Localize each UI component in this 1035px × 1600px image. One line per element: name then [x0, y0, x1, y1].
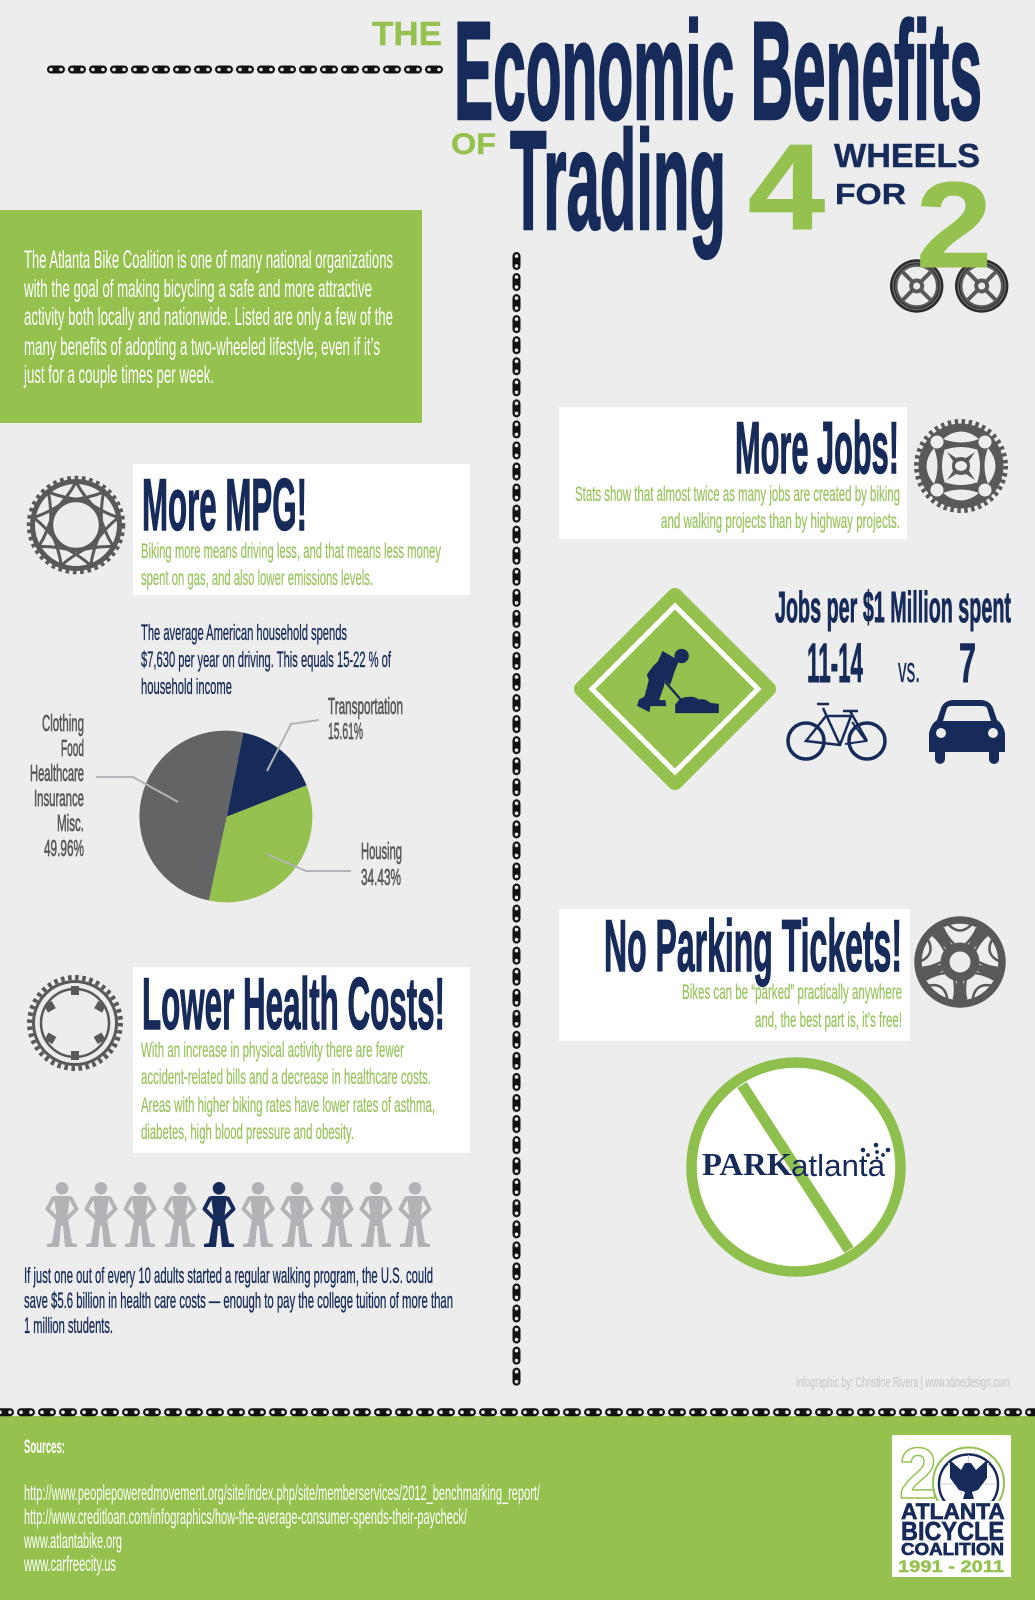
panel: introduction: with the goal of making bicycling a safe and more attractive	[23, 275, 372, 303]
logo years: 1991 - 2011	[898, 1557, 1004, 1576]
logo text: BICYCLE	[901, 1516, 1004, 1546]
source links: http://www.creditloan.com/infographics/how-the-average-consumer-spends-their-paycheck/	[24, 1506, 467, 1529]
text: walking program: 1 million students.	[24, 1313, 113, 1338]
icon: road work sign	[582, 596, 768, 782]
body text: more mpg: Biking more means driving less, and that means less money	[141, 539, 441, 563]
panel: lower health costs	[133, 964, 470, 1153]
title	[372, 0, 1008, 313]
body text: lower health costs: accident-related bills and a decrease in healthcare costs.	[141, 1065, 431, 1089]
chart: jobs per million	[775, 583, 1011, 764]
chain: top horizontal	[47, 65, 444, 74]
chart: jobs per million: vs.	[898, 649, 920, 690]
pie labels	[30, 693, 403, 890]
pie chart	[96, 720, 351, 902]
source links: www.atlantabike.org	[23, 1530, 122, 1553]
chain: centre vertical	[512, 252, 521, 1387]
panel: introduction: The Atlanta Bike Coalition is one of many national organizations	[24, 246, 393, 274]
text: walking program: If just one out of every 10 adults started a regular walking program, the U.S. could	[24, 1263, 433, 1288]
pie labels: Healthcare	[30, 760, 84, 786]
pie labels: Misc.	[57, 810, 84, 836]
logo: PARKatlanta: atlanta	[791, 1148, 886, 1183]
body text: no parking: and, the best part is, it’s free!	[755, 1008, 902, 1032]
panel: introduction: many benefits of adopting a two-wheeled lifestyle, even if it’s	[24, 333, 380, 361]
pie labels: Food	[61, 735, 84, 761]
panel: no parking tickets	[559, 906, 910, 1041]
chart: jobs per million: 11-14	[807, 631, 863, 694]
text: household spending: The average American household spends	[141, 620, 347, 645]
pie labels: Clothing	[42, 710, 84, 736]
icon: bike wheels	[890, 259, 1008, 313]
title: Trading	[510, 101, 726, 259]
body text: lower health costs: Areas with higher biking rates have lower rates of asthma,	[141, 1093, 435, 1117]
logo text: ATLANTA	[901, 1499, 1005, 1524]
text: household spending: household income	[141, 674, 232, 699]
icon: gear more jobs	[916, 422, 1006, 510]
pie labels: Transportation	[328, 693, 403, 719]
panel: introduction	[0, 210, 422, 423]
icon: no ParkAtlanta sign	[692, 1062, 900, 1272]
icon: gear lower health	[30, 978, 120, 1068]
infographic: Lower Health Costs!	[142, 964, 445, 1045]
source links: http://www.peoplepoweredmovement.org/site/index.php/site/memberservices/2012_benchmarking_report/	[24, 1482, 540, 1505]
logo: 20 emblem	[895, 1434, 1008, 1561]
panel: more mpg: More MPG!	[142, 465, 307, 546]
panel: introduction: just for a couple times per week.	[23, 361, 214, 389]
title: FOR: FOR	[835, 179, 906, 211]
logo text: COALITION	[901, 1539, 1004, 1559]
chain: bottom horizontal	[0, 1408, 1035, 1417]
pie labels: 15.61%	[328, 718, 363, 744]
pictogram: ten people	[47, 1182, 430, 1247]
body text: lower health costs: diabetes, high blood pressure and obesity.	[141, 1120, 354, 1144]
pie labels: 34.43%	[361, 864, 401, 890]
source links: www.carfreecity.us	[23, 1553, 116, 1576]
panel: footer sources	[0, 1416, 1035, 1600]
logo: PARKatlanta	[702, 1143, 890, 1183]
heading: Sources: Sources:	[24, 1437, 65, 1458]
text: walking program: save $5.6 billion in health care costs — enough to pay the college tuition of more than	[24, 1288, 453, 1313]
logo: 20 emblem: 2	[899, 1434, 937, 1514]
leader lines	[96, 720, 351, 871]
logo: Atlanta Bicycle Coalition	[892, 1434, 1011, 1577]
icon: worker shovelling	[638, 649, 718, 713]
icon: bicycle	[788, 704, 885, 759]
title: THE: THE	[372, 15, 442, 52]
title: 2: 2	[916, 157, 992, 293]
body text: more mpg: spent on gas, and also lower emissions levels.	[141, 566, 373, 590]
panel: more jobs	[559, 407, 907, 539]
pie labels: 49.96%	[44, 835, 84, 861]
body text: lower health costs: With an increase in physical activity there are fewer	[141, 1038, 404, 1062]
icon: gear more mpg	[28, 478, 124, 573]
pie labels: Insurance	[34, 785, 84, 811]
icon: car	[929, 700, 1005, 764]
title: 4: 4	[748, 119, 825, 255]
title: WHEELS: WHEELS	[834, 137, 980, 174]
panel: introduction: activity both locally and nationwide. Listed are only a few of the	[24, 303, 393, 331]
text: household spending: $7,630 per year on driving. This equals 15-22 % of	[141, 647, 391, 672]
icon: gear no parking	[918, 920, 1002, 1004]
infographic: Housing	[361, 838, 402, 864]
panel: more mpg	[133, 464, 470, 595]
logo: PARKatlanta: PARK	[702, 1146, 792, 1182]
stat: car jobs: 7	[959, 631, 976, 694]
title: OF: OF	[451, 128, 496, 161]
